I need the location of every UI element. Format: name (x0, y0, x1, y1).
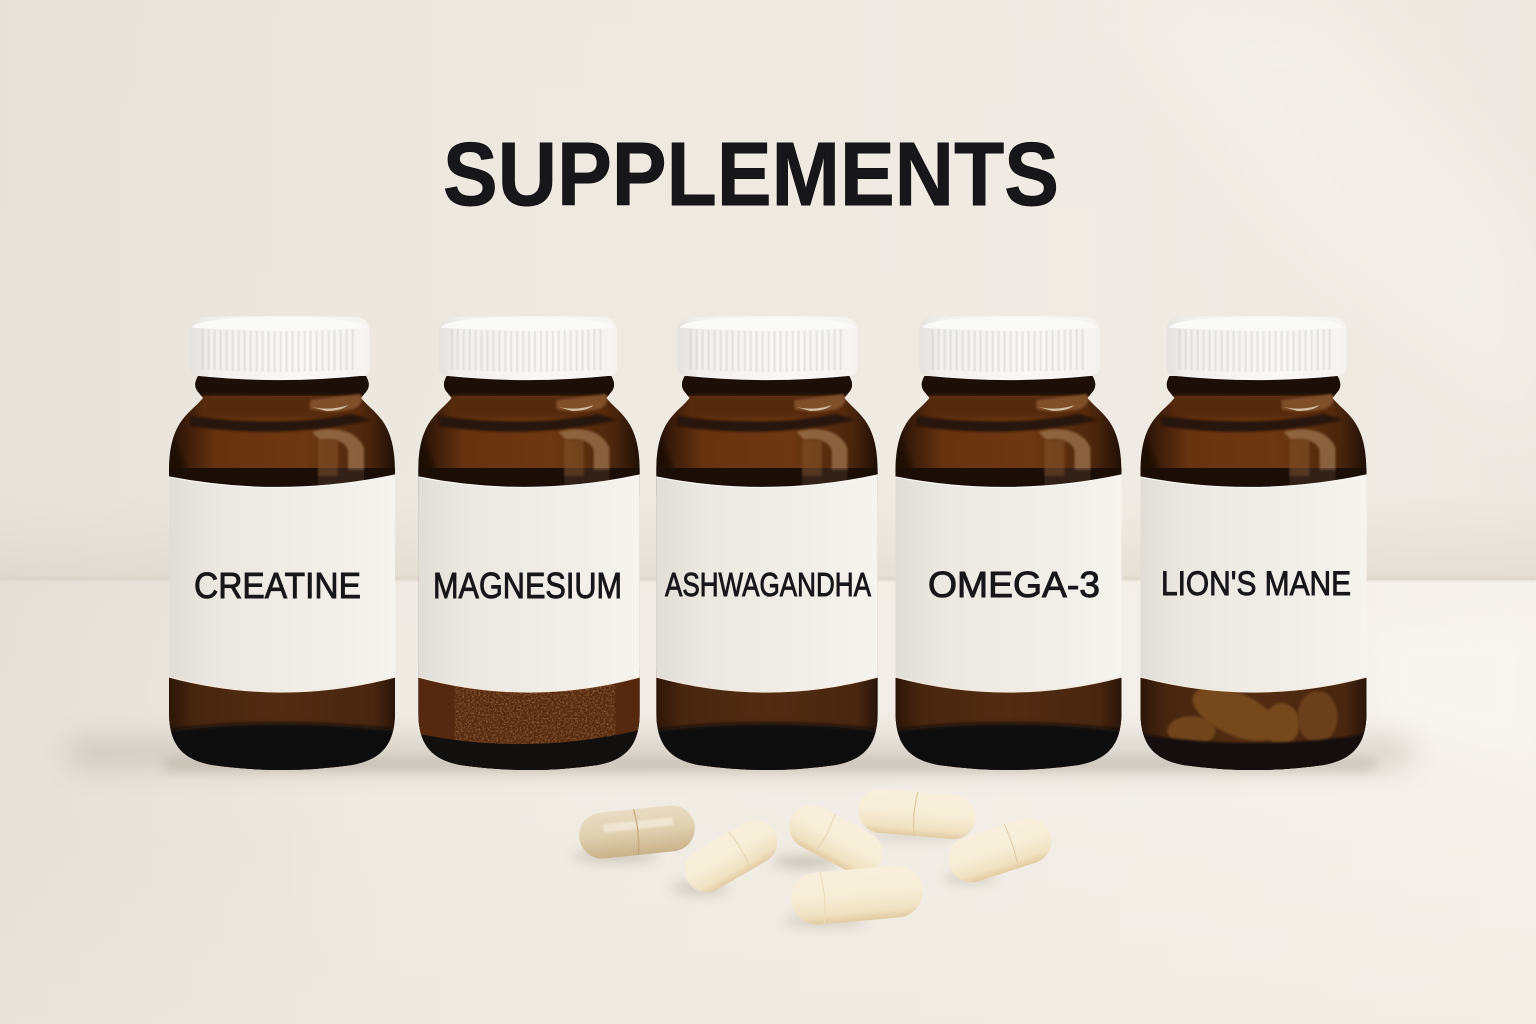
capsule 5 (942, 812, 1058, 888)
jar: magnesium (416, 316, 642, 775)
label text: lion's mane: LION'S MANE (1161, 565, 1351, 603)
capsule 4 (856, 787, 978, 841)
cap: ashwagandha (678, 316, 858, 380)
capsule shadows (573, 832, 996, 925)
title: SUPPLEMENTS (443, 124, 1059, 225)
label text: ashwagandha: ASHWAGANDHA (665, 566, 871, 603)
jar shadows on table (70, 738, 1410, 770)
cap: creatine (190, 316, 370, 380)
jar: ashwagandha (654, 316, 880, 775)
label text: omega-3: OMEGA-3 (928, 564, 1100, 605)
capsule 1: tan (577, 803, 697, 861)
label text: magnesium: MAGNESIUM (433, 565, 622, 606)
jar body with capsules: lion's mane (1138, 375, 1368, 775)
jar body with powder: magnesium (416, 375, 642, 775)
jar body: creatine (167, 375, 397, 775)
capsule 3 (782, 797, 890, 883)
label text: creatine: CREATINE (194, 565, 361, 606)
cap: magnesium (439, 316, 617, 380)
jar: creatine (167, 316, 397, 775)
jar body: ashwagandha (654, 375, 880, 775)
jar: omega-3 (894, 316, 1124, 775)
capsule 2 (677, 812, 785, 900)
jar body: omega-3 (894, 375, 1124, 775)
cap: omega-3 (920, 316, 1100, 380)
capsule 6 (789, 863, 925, 927)
capsules (573, 787, 1058, 927)
cap: lion's mane (1166, 316, 1346, 380)
jar: lion's mane (1138, 316, 1368, 775)
